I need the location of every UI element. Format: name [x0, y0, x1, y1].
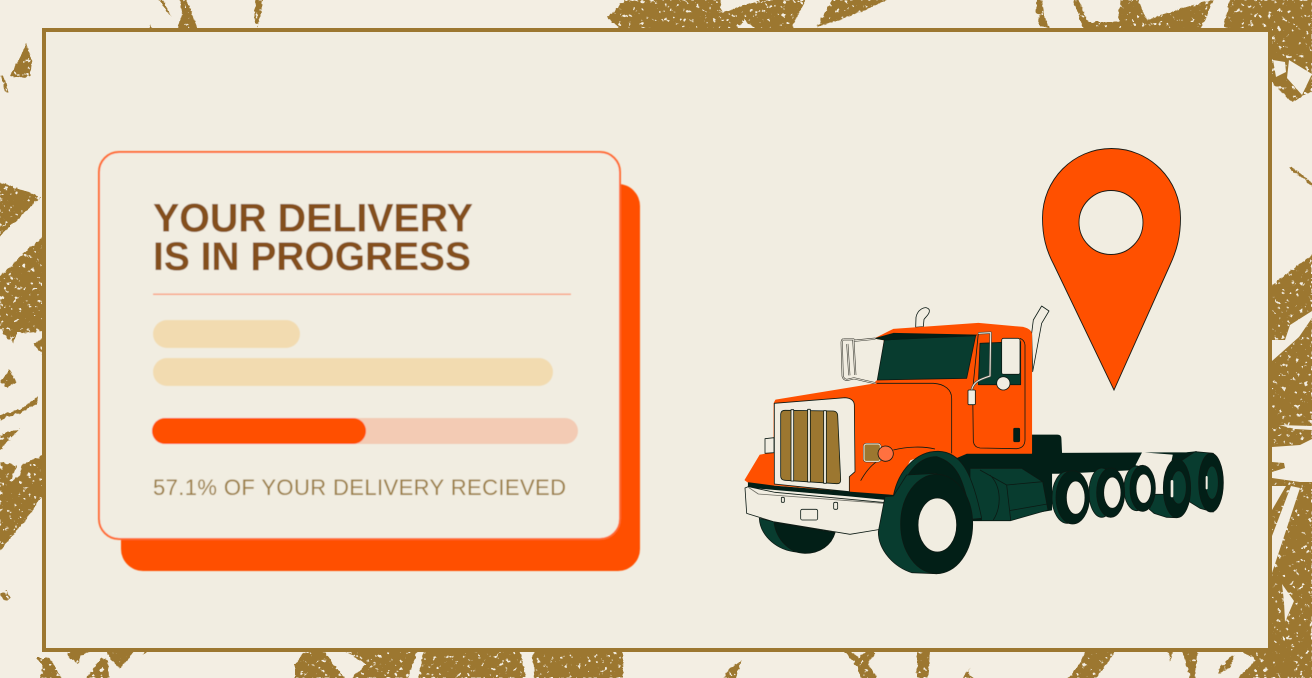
exhaust stack right: [1032, 306, 1049, 372]
progress bar: [152, 418, 578, 444]
rear wheel four: [1149, 459, 1191, 518]
mirror arm: [972, 333, 991, 390]
rear wheel three: [1124, 465, 1155, 511]
placeholder pill long: [153, 358, 553, 386]
progress caption: 57.1% OF YOUR DELIVERY RECIEVED: [153, 475, 566, 500]
heading: YOUR DELIVERY: [153, 196, 473, 240]
mirror knob: [997, 377, 1010, 390]
front wheel: [878, 473, 973, 574]
grille housing: [774, 398, 855, 492]
card shadow: [121, 184, 640, 571]
windshield: [877, 336, 976, 380]
inner wheel arch: [898, 456, 982, 523]
door outline: [973, 333, 1025, 449]
rear wheel far right: [1180, 452, 1223, 512]
rear wheel one: [1052, 471, 1089, 524]
bumper: [745, 487, 893, 534]
heading: IS IN PROGRESS: [153, 235, 471, 279]
pin hole: [1079, 190, 1143, 254]
windshield visor: [875, 333, 977, 340]
hood edge: [877, 383, 952, 453]
chassis: [957, 435, 1197, 513]
left headlamp bracket: [765, 438, 774, 453]
exhaust stack left: [916, 308, 929, 327]
cab and hood: [745, 323, 1032, 495]
headlight: [864, 444, 893, 461]
fender light line: [861, 447, 935, 481]
panel: delivery card: [99, 152, 640, 571]
texture cut-outs: [1272, 60, 1312, 622]
icon: location pin: [1042, 148, 1180, 390]
rear chassis and wheels: [957, 435, 1223, 524]
rear wheel two: [1089, 468, 1125, 517]
far front wheel: [759, 518, 835, 553]
side window: [978, 342, 1021, 385]
side mirror: [1002, 338, 1020, 374]
illustration: truck: [745, 306, 1223, 574]
divider: [153, 294, 571, 295]
fuel tank: [970, 468, 1048, 521]
white mudguard: [1136, 453, 1172, 494]
black bumper strip: [748, 483, 893, 500]
front mudguard: [893, 451, 982, 519]
placeholder pill short: [153, 320, 300, 348]
heading: [153, 196, 473, 279]
grille: [781, 409, 841, 484]
card body: [99, 152, 620, 539]
left wing mirror: [842, 339, 876, 383]
small lower mirror: [968, 390, 975, 405]
door handle: [1014, 428, 1020, 442]
